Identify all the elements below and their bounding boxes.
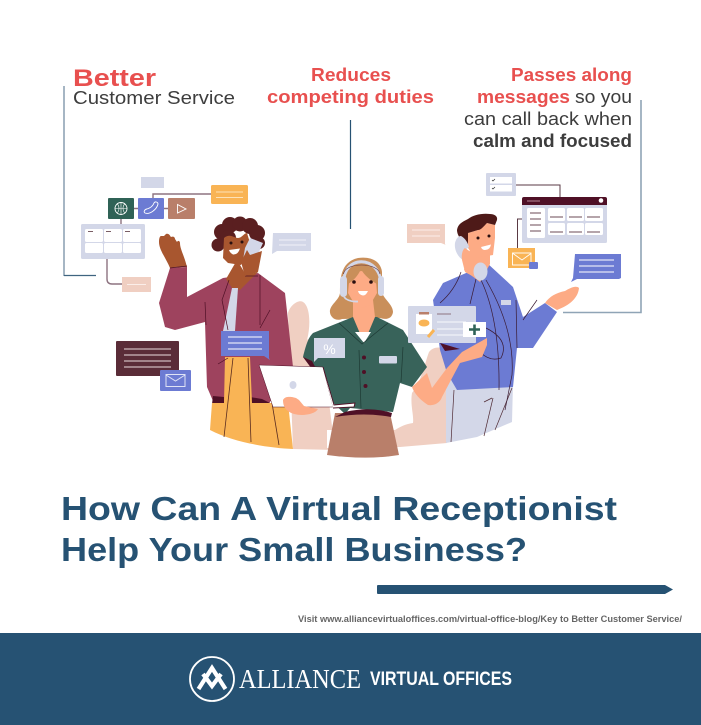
icon: pink speech bubble [407, 224, 446, 245]
shirt [303, 317, 427, 414]
hand on phone [241, 250, 262, 276]
hair [330, 258, 393, 320]
callout: better customer service: Customer Service [73, 88, 235, 108]
callout: passes along messages: messages [477, 86, 570, 107]
logo: alliance virtual offices: VIRTUAL OFFICES [370, 669, 512, 690]
trousers [446, 380, 513, 443]
curly hair [212, 216, 265, 252]
icon: flow diagram widgets [81, 177, 248, 292]
footer banner [0, 633, 701, 725]
illustration: team of receptionists [81, 173, 621, 458]
face [468, 223, 495, 258]
callout: passes along messages [464, 64, 632, 151]
connector line: left [64, 86, 96, 276]
icon: speech bubble lavender [272, 233, 311, 254]
callout: reduces competing duties [267, 64, 434, 107]
person: man with phone [433, 214, 579, 443]
icon: orange mail [508, 248, 538, 269]
laptop [259, 365, 355, 415]
callout: reduces competing duties: Reduces [311, 64, 391, 85]
icon: dark message box and mail [116, 341, 191, 391]
raised hand [159, 234, 187, 268]
connector line: center [350, 120, 352, 229]
skirt [327, 413, 399, 458]
right hand [545, 287, 579, 310]
shirt [433, 263, 557, 390]
logo: alliance virtual offices: ALLIANCE [239, 664, 361, 694]
phone [243, 238, 263, 260]
shirt [223, 288, 238, 331]
icon: blue speech bubble right [571, 254, 621, 282]
icon: checklist and calendar widgets [486, 173, 607, 248]
skirt [210, 357, 293, 449]
callout: passes along messages: so you [575, 86, 632, 107]
blazer [159, 267, 293, 405]
logo: alliance virtual offices [190, 657, 512, 701]
title: Help Your Small Business? [61, 532, 527, 569]
phone and hand [455, 236, 469, 260]
title: How Can A Virtual Receptionist [61, 491, 617, 528]
callout: passes along messages: calm and focused [473, 130, 632, 151]
person: woman with curly hair [159, 216, 293, 449]
title [61, 491, 617, 569]
connector line: right [563, 100, 641, 312]
callout: passes along messages: can call back when [464, 108, 632, 129]
arrow bar [377, 585, 673, 594]
callout: better customer service [73, 65, 235, 108]
source url: Visit www.alliancevirtualoffices.com/virtual-office-blog/Key to Better Customer Service/ [298, 614, 683, 624]
callout: passes along messages: Passes along [511, 64, 632, 85]
headset [344, 262, 381, 285]
face [223, 233, 250, 265]
neck [226, 260, 258, 290]
icon: clinic card with plus [408, 306, 486, 343]
arm and hand [412, 338, 487, 405]
background plants and base [288, 301, 447, 450]
face [348, 270, 377, 308]
neck [464, 250, 490, 282]
person: woman with headset [303, 258, 487, 458]
callout: better customer service: Better [73, 65, 156, 92]
hair [457, 214, 497, 245]
icon: blue speech bubble [221, 331, 270, 360]
icon: percent bubble [314, 338, 345, 362]
callout: reduces competing duties: competing duties [267, 86, 434, 107]
icon: percent bubble: % [323, 341, 336, 357]
